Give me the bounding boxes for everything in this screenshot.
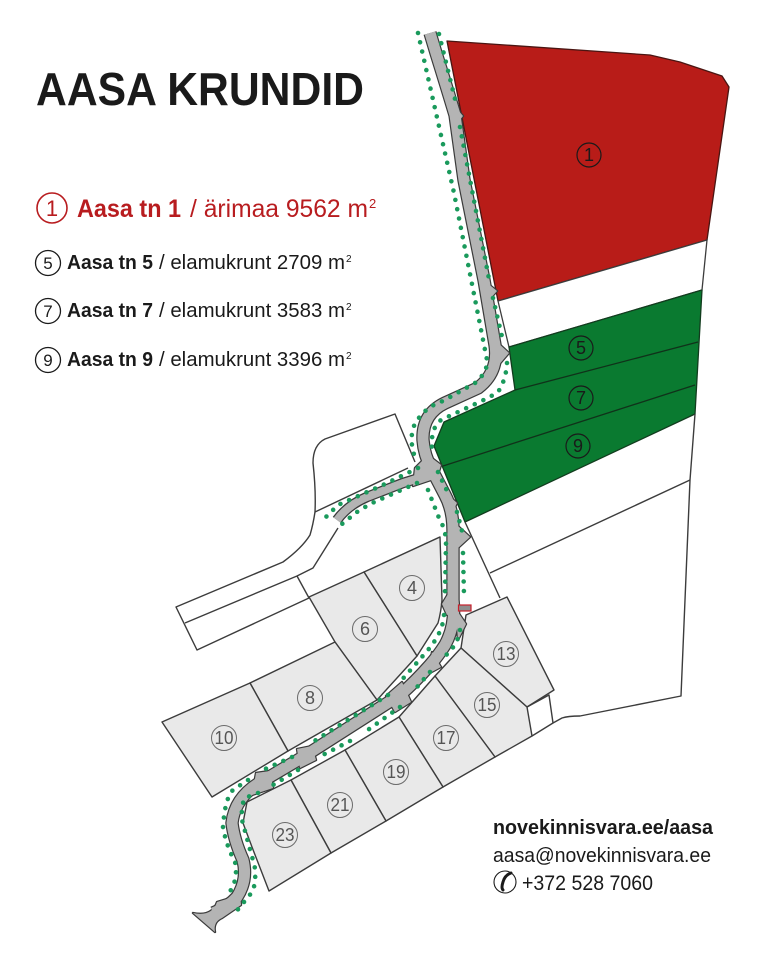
number 9 [566,434,590,458]
red commercial plot 1 [447,41,729,301]
icon: phone [494,871,516,893]
marker: red building [458,605,471,611]
number 13 [494,642,518,666]
legend row: plot 7: Aasa tn 7 [67,300,153,322]
number 1: 1 [584,145,594,165]
road [193,33,509,932]
legend row: plot 7: / elamukrunt 3583 m [159,300,345,322]
contact block [493,817,714,895]
number 17: 17 [436,728,456,748]
number 13: 13 [496,644,516,664]
legend row: plot 1: Aasa tn 1 [77,195,181,223]
legend row: plot 5: / elamukrunt 2709 m [159,252,345,274]
legend row: plot 9 [36,348,352,372]
title: AASA KRUNDID [36,63,364,115]
number 6 [352,616,378,642]
number 23 [272,822,298,848]
number 7: 7 [576,388,586,408]
legend row: plot 5: Aasa tn 5 [67,252,153,274]
legend row: plot 7: 7 [43,302,53,321]
legend row: plot 9: Aasa tn 9 [67,349,153,371]
number 1 [577,143,601,167]
legend row: plot 5 [36,250,352,276]
legend row: plot 7 [36,298,352,324]
number 21 [328,792,352,818]
legend row: plot 5: 2 [346,254,352,265]
plot numbers on map [212,143,601,848]
number 15 [474,692,500,718]
legend row: plot 1 [37,193,376,223]
legend row: plot 7: 2 [346,302,352,313]
website: novekinnisvara.ee/aasa [493,817,714,839]
legend row: plot 1: / ärimaa 9562 m [190,195,368,223]
number 9: 9 [573,436,583,456]
grey plots north of road [162,537,442,797]
number 19 [384,760,408,784]
number 7 [569,386,593,410]
number 5: 5 [576,338,586,358]
legend [36,193,376,372]
legend row: plot 9: 9 [43,351,53,370]
number 4 [400,576,424,600]
number 21: 21 [330,795,350,815]
western strip plots [176,414,440,650]
number 19: 19 [386,762,406,782]
white plot below plot 1 [498,240,707,347]
legend row: plot 9: / elamukrunt 3396 m [159,349,345,371]
site map [162,33,729,932]
grey plots south of road [243,597,554,891]
number 8: 8 [305,688,315,708]
email: aasa@novekinnisvara.ee [493,845,711,867]
number 4: 4 [407,578,417,598]
green dotted tree rows [223,33,507,913]
legend row: plot 9: 2 [346,351,352,362]
eastern open plots [465,414,695,723]
number 17 [434,726,458,750]
legend row: plot 1: 1 [46,196,58,221]
number 5 [569,336,593,360]
phone number: +372 528 7060 [522,872,653,895]
legend row: plot 5: 5 [43,254,53,273]
green residential plots 5 7 9 [434,290,702,522]
number 8 [298,686,322,710]
legend row: plot 1: 2 [369,196,376,211]
number 6: 6 [360,619,370,639]
number 10 [212,726,236,750]
number 23: 23 [276,825,294,845]
number 10: 10 [214,728,234,748]
number 15: 15 [478,695,496,715]
